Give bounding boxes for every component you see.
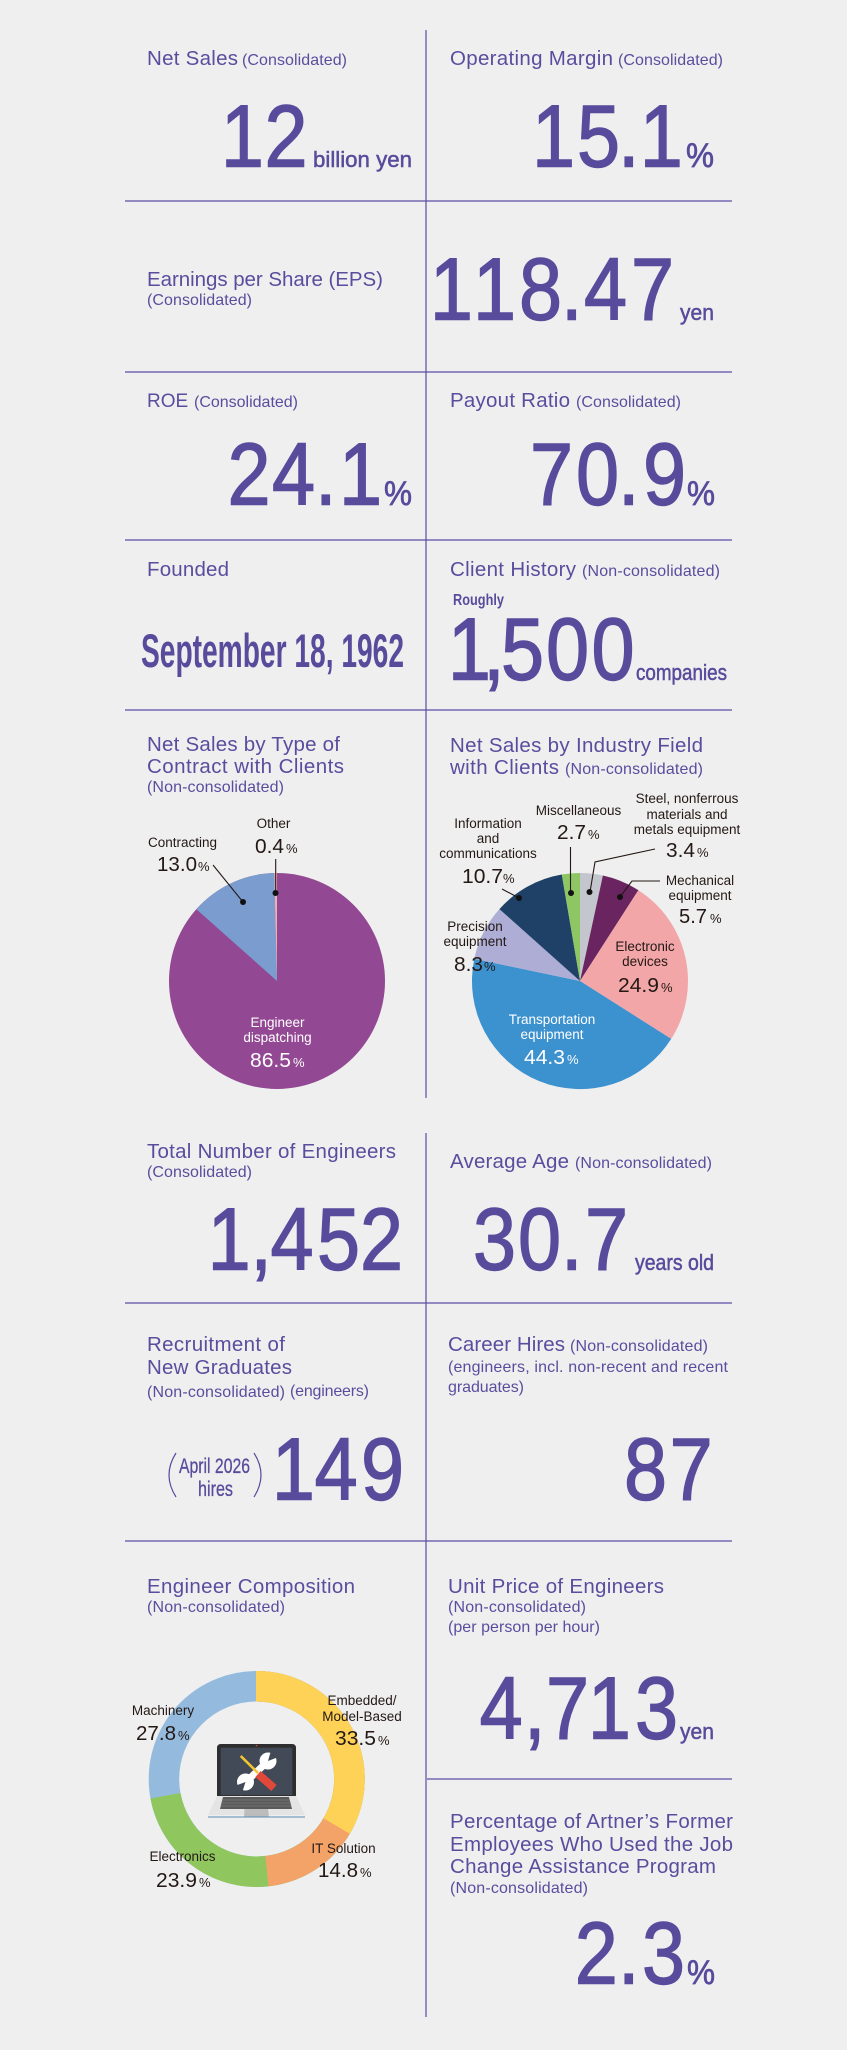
panel: earnings per share — [147, 240, 714, 339]
heading: recruitment: New Graduates — [147, 1356, 292, 1379]
value: 1,452: 1,452 — [208, 1190, 403, 1289]
label: embedded: 33.5 — [335, 1727, 376, 1750]
label: embedded: Embedded/ — [327, 1693, 397, 1708]
leader: other — [272, 859, 278, 896]
value: 118.47 yen: 118.47 — [430, 240, 674, 339]
donut chart — [164, 1686, 349, 1872]
value: 2.3%: % — [687, 1954, 715, 1992]
heading: operating margin — [450, 47, 723, 70]
label: other: % — [286, 841, 298, 856]
heading: total engineers: Total Number of Engineers — [147, 1140, 396, 1163]
label: mechanical: Mechanical — [666, 873, 734, 888]
label: mechanical: 5.7 — [679, 905, 707, 928]
heading: career hires: (Non-consolidated) — [570, 1338, 708, 1355]
label: miscellaneous: Miscellaneous — [536, 803, 622, 818]
label: steel: materials and — [646, 807, 728, 822]
heading: payout ratio — [450, 389, 681, 412]
label: IT solution: % — [360, 1865, 372, 1880]
value: 30.7 years old — [473, 1190, 714, 1289]
note: April 2026 hires: hires — [198, 1478, 233, 1501]
heading: net sales — [147, 47, 347, 70]
heading: average age: Average Age — [450, 1150, 569, 1173]
pie chart: industry — [472, 873, 688, 1089]
heading: earnings per share: Earnings per Share (EPS) — [147, 268, 383, 291]
heading: recruitment: (Non-consolidated) — [147, 1384, 285, 1401]
panel: founded — [141, 558, 404, 677]
value: 149: 149 — [272, 1420, 404, 1519]
note: April 2026 hires: April 2026 — [179, 1455, 250, 1478]
value: 2.3%: 2.3 — [575, 1904, 685, 2003]
label: mechanical: % — [710, 911, 722, 926]
panel: net sales by industry — [439, 734, 741, 1089]
value: founding date: September 18, 1962 — [141, 624, 404, 677]
label: other: 0.4 — [255, 835, 284, 858]
value: 70.9%: % — [687, 475, 715, 513]
label: steel: % — [697, 845, 709, 860]
value: 87: 87 — [624, 1420, 713, 1519]
label: engineer dispatching: % — [293, 1055, 305, 1070]
heading: total engineers — [147, 1140, 396, 1181]
value: 24.1%: % — [384, 475, 412, 513]
label: steel — [634, 791, 741, 862]
value: 12 billion yen: billion yen — [313, 147, 412, 172]
panel: client history — [448, 558, 727, 699]
label: steel: 3.4 — [666, 839, 695, 862]
value: 4,713 yen: yen — [680, 1719, 714, 1744]
value: 30.7 years old: years old — [635, 1250, 714, 1275]
label: electronic devices: % — [661, 980, 673, 995]
heading: net sales: (Consolidated) — [242, 52, 347, 69]
panel: job change assistance — [450, 1810, 733, 2003]
heading: career hires: (engineers, incl. non-recent and recent — [448, 1359, 729, 1376]
label: transportation — [509, 1012, 595, 1069]
panel: net sales — [147, 47, 412, 186]
heading: net sales by contract type: (Non-consolidated) — [147, 779, 284, 796]
heading: ROE — [147, 391, 298, 412]
heading: job change assistance: Employees Who Used the Job — [450, 1833, 733, 1856]
label: electronics: 23.9 — [156, 1869, 197, 1892]
heading: net sales by contract type — [147, 733, 344, 796]
label: electronics: Electronics — [149, 1849, 216, 1864]
heading: earnings per share: (Consolidated) — [147, 292, 252, 309]
value: 15.1%: % — [686, 137, 714, 175]
label: information: and — [477, 831, 499, 846]
label: information — [439, 816, 537, 888]
label: embedded: % — [378, 1733, 390, 1748]
label: precision: equipment — [443, 934, 507, 949]
label: transportation: % — [567, 1052, 579, 1067]
label: miscellaneous: % — [588, 827, 600, 842]
heading: operating margin: (Consolidated) — [618, 52, 723, 69]
heading: career hires: graduates) — [448, 1379, 524, 1396]
heading: unit price: (Non-consolidated) — [448, 1599, 586, 1616]
label: contracting — [148, 835, 217, 876]
value: 1,500 companies — [448, 600, 727, 699]
heading: average age: (Non-consolidated) — [575, 1155, 712, 1172]
label: electronic devices — [615, 939, 675, 997]
label: miscellaneous — [536, 803, 622, 844]
heading: client history — [450, 558, 720, 581]
label: information: 10.7 — [462, 865, 503, 888]
label: IT solution: 14.8 — [318, 1859, 358, 1882]
value: 24.1%: 24.1 — [227, 425, 382, 524]
panel: operating margin — [450, 47, 723, 186]
label: other — [255, 816, 298, 858]
label: engineer dispatching: dispatching — [243, 1030, 312, 1045]
value: 1,500 companies: 1,500 — [448, 600, 635, 699]
label: machinery: % — [178, 1728, 190, 1743]
label: contracting: % — [198, 859, 210, 874]
panel: average age — [450, 1150, 714, 1289]
value: 12 billion yen — [221, 87, 412, 186]
heading: job change assistance: Percentage of Artner’s Former — [450, 1810, 733, 1833]
label: machinery: Machinery — [132, 1703, 194, 1718]
label: precision: Precision — [447, 919, 503, 934]
heading: payout ratio: Payout Ratio — [450, 389, 570, 412]
label: mechanical — [666, 873, 734, 928]
label: transportation: 44.3 — [524, 1046, 565, 1069]
label: engineer dispatching: 86.5 — [250, 1049, 291, 1072]
heading: operating margin: Operating Margin — [450, 47, 613, 70]
heading: net sales by industry — [449, 734, 703, 779]
label: precision: 8.3 — [454, 953, 483, 976]
label: information: communications — [439, 846, 537, 861]
panel: career hires — [448, 1333, 729, 1519]
heading: career hires: Career Hires — [448, 1333, 565, 1356]
heading: engineer composition: Engineer Composition — [147, 1575, 355, 1598]
heading: total engineers: (Consolidated) — [147, 1164, 252, 1181]
heading: net sales by industry: with Clients — [449, 756, 559, 779]
label: steel: Steel, nonferrous — [636, 791, 739, 806]
label: precision — [443, 919, 507, 976]
label: transportation: Transportation — [509, 1012, 595, 1027]
label: IT solution: IT Solution — [311, 1841, 376, 1856]
value: 118.47 yen: yen — [680, 300, 714, 325]
label: information: % — [503, 871, 515, 886]
label: embedded: Model-Based — [322, 1709, 402, 1724]
label: engineer dispatching — [243, 1015, 312, 1072]
label: information: Information — [454, 816, 522, 831]
pie chart: contract type — [169, 873, 385, 1089]
note: April 2026 hires — [169, 1453, 261, 1501]
label: electronics: % — [199, 1875, 211, 1890]
label: embedded — [322, 1693, 402, 1750]
heading: net sales by contract type: Contract with Clients — [147, 755, 344, 778]
heading: net sales by contract type: Net Sales by Type of — [147, 733, 340, 756]
heading: net sales by industry: Net Sales by Industry Field — [450, 734, 703, 757]
heading: net sales: Net Sales — [147, 47, 238, 70]
panel: engineer composition — [132, 1575, 402, 1892]
value: 4,713 yen: 4,713 — [480, 1659, 678, 1758]
heading: unit price — [448, 1575, 664, 1636]
heading: ROE: ROE — [147, 391, 188, 412]
label: contracting: 13.0 — [157, 853, 197, 876]
label: electronic devices: Electronic — [615, 939, 675, 954]
heading: engineer composition — [147, 1575, 355, 1616]
label: electronics — [149, 1849, 216, 1892]
heading: job change assistance: (Non-consolidated) — [450, 1880, 588, 1897]
heading: career hires — [448, 1333, 729, 1396]
panel: ROE — [147, 391, 412, 524]
value: 70.9%: 70.9 — [530, 425, 686, 524]
value: 15.1%: 15.1 — [532, 87, 683, 186]
label: mechanical: equipment — [668, 888, 732, 903]
label: steel: metals equipment — [634, 822, 741, 837]
heading: job change assistance — [450, 1810, 733, 1897]
heading: net sales by industry: (Non-consolidated) — [565, 761, 703, 778]
label: contracting: Contracting — [148, 835, 217, 850]
heading: average age — [450, 1150, 712, 1173]
value: 30.7 years old: 30.7 — [473, 1190, 628, 1289]
label: engineer dispatching: Engineer — [250, 1015, 305, 1030]
panel: total engineers — [147, 1140, 403, 1289]
heading: client history: Client History — [450, 558, 577, 581]
heading: ROE: (Consolidated) — [194, 394, 298, 411]
label: IT solution — [311, 1841, 376, 1882]
note: roughly: Roughly — [453, 592, 504, 609]
label: machinery — [132, 1703, 194, 1745]
label: precision: % — [484, 959, 496, 974]
heading: payout ratio: (Consolidated) — [576, 394, 681, 411]
icon: laptop with tools — [208, 1744, 305, 1818]
value: 1,500 companies: companies — [636, 660, 727, 685]
panel: unit price of engineers — [448, 1575, 714, 1758]
heading: client history: (Non-consolidated) — [582, 563, 720, 580]
label: electronic devices: 24.9 — [618, 974, 659, 997]
panel: recruitment of new graduates — [147, 1333, 404, 1519]
label: machinery: 27.8 — [136, 1722, 176, 1745]
panel: payout ratio — [450, 389, 715, 524]
heading: engineer composition: (Non-consolidated) — [147, 1599, 285, 1616]
panel: net sales by contract type — [147, 733, 385, 1089]
leader: contracting — [213, 865, 246, 905]
heading: earnings per share — [147, 268, 383, 309]
label: other: Other — [257, 816, 291, 831]
heading: unit price: (per person per hour) — [448, 1619, 600, 1636]
heading: unit price: Unit Price of Engineers — [448, 1575, 664, 1598]
heading: founded: Founded — [147, 558, 229, 581]
heading: recruitment: Recruitment of — [147, 1333, 285, 1356]
label: transportation: equipment — [520, 1027, 584, 1042]
leaders: industry — [502, 847, 660, 901]
label: miscellaneous: 2.7 — [557, 821, 586, 844]
value: 12 billion yen: 12 — [221, 87, 308, 186]
heading: recruitment — [147, 1333, 369, 1401]
label: electronic devices: devices — [622, 954, 668, 969]
heading: job change assistance: Change Assistance Program — [450, 1855, 716, 1878]
heading: recruitment: (engineers) — [290, 1383, 369, 1400]
